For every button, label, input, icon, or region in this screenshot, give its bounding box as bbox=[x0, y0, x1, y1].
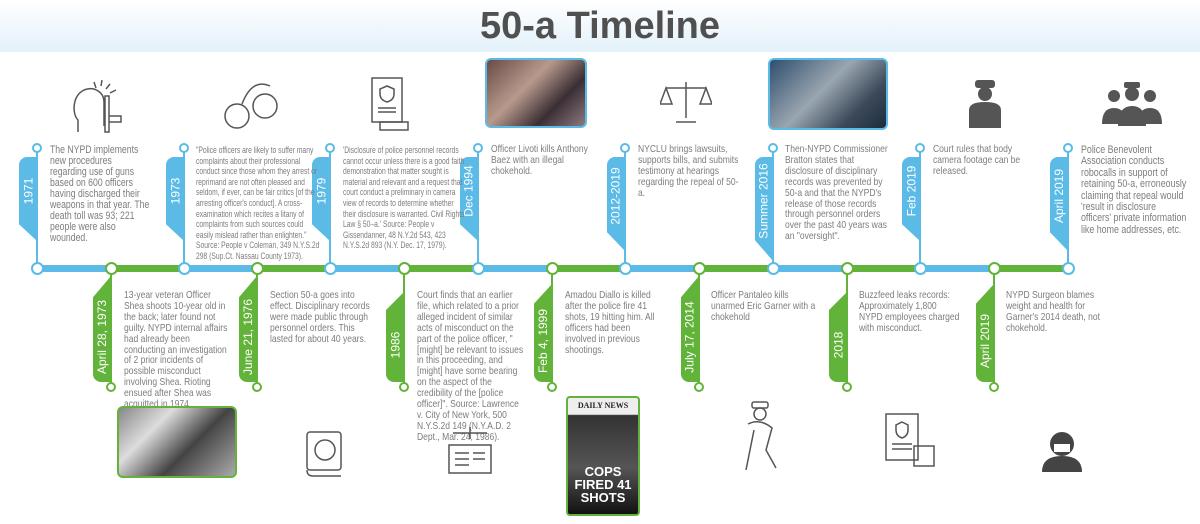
tab: Dec 1994: Dec 1994 bbox=[462, 165, 476, 217]
text: 1979 quote: 'Disclosure of police personnel records cannot occur unless there is a good faith demonstration that matter sought is material and relevant and a request that court conduct a preliminary in camera view of records to determine whether their disclosure is warranted. Civil Rights Law § 50–a.' Source: People v Gissendanner, 48 N.Y.2d 543, 423 N.Y.S.2d 893 (N.Y. Dec. 17, 1979). bbox=[343, 144, 465, 250]
tab: 2012-2019 bbox=[607, 157, 625, 251]
text: July 17 2014: Officer Pantaleo kills unarmed Eric Garner with a chokehold bbox=[711, 290, 815, 323]
icon: scales bbox=[660, 82, 712, 123]
tab: July 17, 2014 bbox=[681, 276, 699, 382]
icon: handcuffs bbox=[224, 83, 278, 129]
icon: surgeon bbox=[1042, 432, 1082, 472]
tab: 2018: 2018 bbox=[831, 332, 845, 358]
text: 2012-2019: NYCLU brings lawsuits, supports bills, and submits testimony at hearings regarding the repeal of 50-a. bbox=[638, 144, 738, 199]
tab: 1973: 1973 bbox=[168, 178, 182, 204]
text: April 28 1973: 13-year veteran Officer Shea shoots 10-year old in the back; later found not guilty. NYPD internal affairs had already been conducting an investigation of 2 prior incidents of possible misconduct involving Shea. Rioting ensued after Shea was acquitted in 1974. bbox=[124, 290, 227, 410]
icon: document badge bbox=[371, 77, 409, 131]
tab: Feb 4, 1999: Feb 4, 1999 bbox=[536, 309, 550, 373]
photo: Daily News cover: DAILY NEWS bbox=[578, 401, 628, 410]
text: Summer 2016: Then-NYPD Commissioner Bratton states that disclosure of disciplinary records was prevented by 50-a and that the NYPD's release of those records through personnel orders over the past 40 years was an "oversight". bbox=[785, 144, 888, 242]
tab: 1979: 1979 bbox=[314, 178, 328, 204]
tab: July 17, 2014: July 17, 2014 bbox=[683, 301, 697, 373]
text: Dec 1994: Officer Livoti kills Anthony Baez with an illegal chokehold. bbox=[491, 144, 588, 177]
icon: head with gun bbox=[73, 80, 122, 133]
nodes bbox=[31, 143, 1075, 428]
text: June 21 1976: Section 50-a goes into effect. Disciplinary records were made public through personnel orders. This lasted for about 40 years. bbox=[270, 290, 370, 345]
tab: Feb 2019 bbox=[902, 157, 920, 241]
tab: Feb 4, 1999 bbox=[534, 284, 552, 382]
tab: April 2019: April 2019 bbox=[1052, 169, 1066, 223]
icon: police group bbox=[1102, 82, 1162, 126]
tab: 2012-2019: 2012-2019 bbox=[609, 167, 623, 225]
tab: 1971 bbox=[19, 157, 37, 241]
icon: officer chokehold bbox=[745, 401, 777, 470]
title: 50-a Timeline bbox=[480, 5, 720, 47]
tab: Feb 2019: Feb 2019 bbox=[904, 166, 918, 216]
tab: Summer 2016 bbox=[755, 157, 773, 261]
tab: 1986: 1986 bbox=[388, 332, 402, 358]
text: 1986: Court finds that an earlier file, which related to a prior alleged incident of similar acts of misconduct on the part of the police officer, "[might] be relevant to issues in this proceeding, and [might] have some bearing on the aspect of the credibility of the [police officer]". Source: Lawrence v. City of New York, 500 N.Y.S.2d 149 (N.Y.A.D. 2 Dept., Mar. 24, 1986). bbox=[417, 290, 523, 443]
tab: April 28, 1973 bbox=[93, 276, 111, 382]
tab: 1973 bbox=[166, 157, 184, 241]
text: Feb 4 1999: Amadou Diallo is killed after the police fire 41 shots, 19 hitting him. All officers had been involved in previous shootings. bbox=[565, 290, 655, 356]
tab: 2018 bbox=[829, 292, 847, 382]
tab: April 2019 bbox=[1050, 157, 1068, 251]
tab: April 28, 1973: April 28, 1973 bbox=[95, 300, 109, 374]
tab: April 2019 bottom: April 2019 bbox=[978, 314, 992, 368]
icon: badge book bbox=[306, 431, 342, 477]
icon: scales document bbox=[448, 427, 492, 474]
vertical connectors bbox=[36, 152, 1069, 428]
tab: Summer 2016: Summer 2016 bbox=[757, 163, 771, 239]
tab: June 21, 1976: June 21, 1976 bbox=[241, 299, 255, 375]
text: 2018: Buzzfeed leaks records: Approximately 1,800 NYPD employees charged with misconduct. bbox=[859, 290, 959, 334]
text: April 2019 top: Police Benevolent Association conducts robocalls in support of retaining 50-a, erroneously claiming that repeal would 'result in disclosure officers' private information like home addresses, etc. bbox=[1081, 144, 1186, 236]
text: 1971: The NYPD implements new procedures regarding use of guns based on 600 officers having discharged their weapons in that year. The death toll was 93; 221 people were also wounded. bbox=[50, 144, 149, 244]
tab: June 21, 1976 bbox=[239, 276, 257, 382]
text: 1973 quote: "Police officers are likely to suffer many complaints about their professional conduct since those whom they arrest or reprimand are not often pleased and seldom, if ever, can be fair critics [of the arresting officer's conduct]. A cross-examination which recites a litany of complaints from such sources could easily mislead rather than enlighten." Source: People v Coleman, 349 N.Y.S.2d 298 (Sup.Ct. Nassau County 1973). bbox=[196, 144, 319, 261]
text: April 2019 bottom: NYPD Surgeon blames weight and health for Garner's 2014 death, not chokehold. bbox=[1006, 290, 1100, 334]
header band bbox=[0, 0, 1200, 52]
icon: documents bbox=[885, 413, 935, 467]
photo: Shea crowd bbox=[117, 406, 237, 478]
text: Feb 2019: Court rules that body camera footage can be released. bbox=[933, 144, 1020, 177]
photo: Baez family bbox=[485, 58, 587, 128]
tab: April 2019 bottom bbox=[976, 284, 994, 382]
tab: 1971: 1971 bbox=[21, 178, 35, 204]
photo: Bratton bbox=[768, 58, 888, 130]
tab: 1979 bbox=[312, 157, 330, 241]
icon: police officer bbox=[969, 80, 1001, 128]
tab: Dec 1994 bbox=[460, 157, 478, 241]
photo: Daily News cover bbox=[566, 396, 640, 516]
photo: Daily News cover: COPS FIRED 41 SHOTS bbox=[574, 464, 632, 505]
tab: 1986 bbox=[386, 292, 404, 382]
